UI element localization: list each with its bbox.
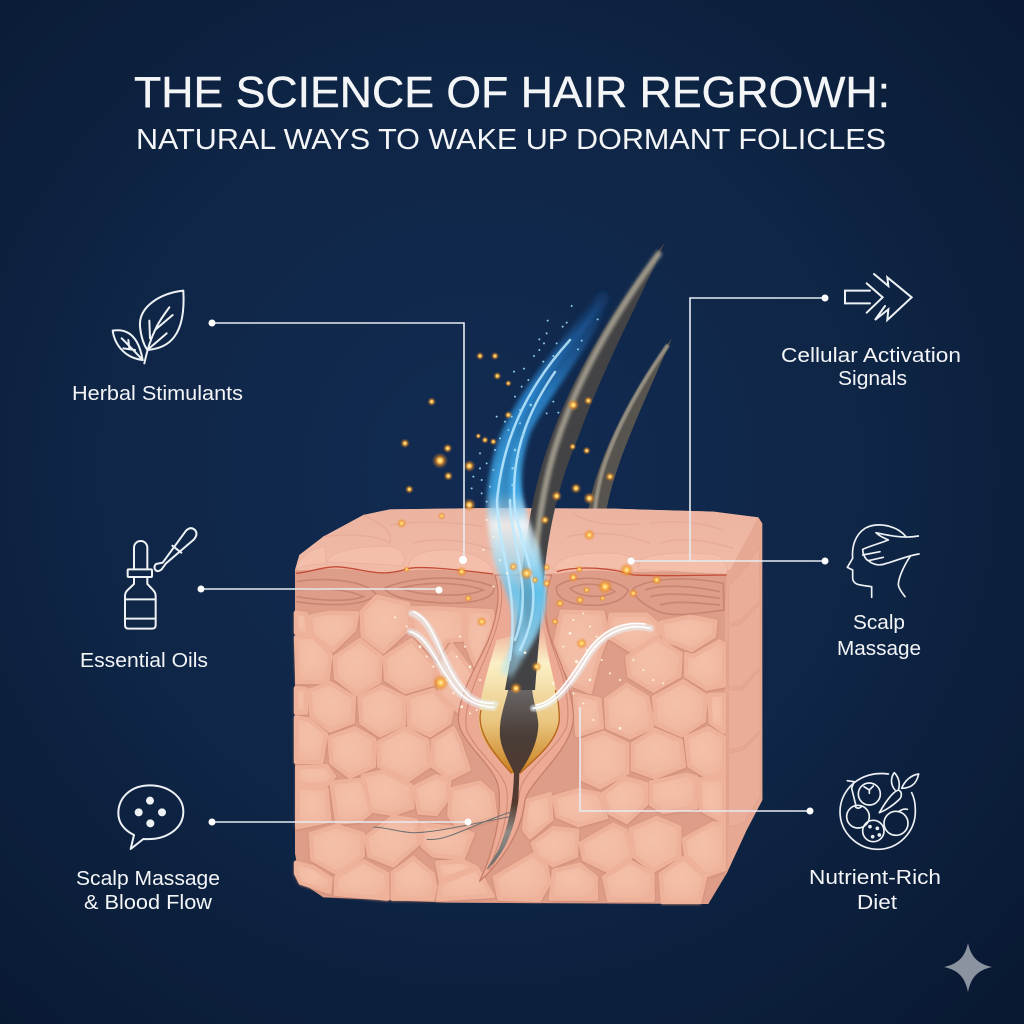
- skin cells: [296, 597, 724, 902]
- cube silhouette: [295, 508, 762, 904]
- blue and white particles: [471, 305, 599, 503]
- label: cellular activation signals: [781, 345, 961, 390]
- icon: cellular activation arrows: [845, 274, 912, 320]
- red junction line: [296, 567, 727, 576]
- dermal band: [295, 569, 727, 618]
- right side face: [725, 517, 762, 873]
- label: cellular activation signals: Signals: [838, 368, 907, 390]
- label: herbal stimulants: Herbal Stimulants: [72, 383, 243, 405]
- blue energy wisps: [493, 297, 603, 685]
- label: scalp massage and blood flow: & Blood Flow: [84, 892, 213, 914]
- label: nutrient-rich diet: Nutrient-Rich: [809, 867, 941, 889]
- side-face cells: [728, 547, 760, 827]
- icon: nutrient-rich fruit and vegetable plate: [840, 773, 919, 849]
- label: scalp massage and blood flow: Scalp Massage: [76, 868, 220, 890]
- label: scalp massage: Massage: [837, 638, 921, 660]
- label: nutrient-rich diet: [809, 867, 941, 914]
- label: scalp massage: [837, 612, 921, 660]
- follicle: [458, 575, 574, 882]
- nerve fibres: [373, 812, 512, 840]
- title: [134, 68, 890, 156]
- skin cube cross-section: [295, 508, 762, 904]
- icon: essential oil bottle and dropper: [125, 528, 196, 629]
- label: cellular activation signals: Cellular Activation: [781, 345, 961, 367]
- golden inner root sheath: [479, 627, 559, 773]
- icon: head with hand massage: [847, 525, 919, 597]
- icon: herbal leaves: [113, 291, 184, 363]
- golden sparkles: [397, 352, 662, 608]
- icon: blood flow speech bubble: [118, 785, 183, 849]
- main hair shaft: [505, 242, 665, 690]
- label: scalp massage and blood flow: [76, 868, 220, 914]
- label: scalp massage: Scalp: [853, 612, 905, 634]
- title: NATURAL WAYS TO WAKE UP DORMANT FOLICLES: [136, 124, 886, 156]
- white sparkle dust in the follicle: [394, 519, 664, 730]
- second hair strand behind the skin: [588, 338, 672, 512]
- white energy waves: [410, 612, 651, 708]
- label: essential oils: Essential Oils: [80, 650, 208, 672]
- hair bulb and root: [486, 680, 538, 870]
- front lip plates: [296, 546, 727, 574]
- follicle outer sheath: [458, 575, 574, 882]
- callout lines with dots: [198, 294, 828, 826]
- golden glow in the dermis: [403, 563, 613, 694]
- title: THE SCIENCE OF HAIR REGROWH:: [134, 68, 890, 117]
- icon: four-point star watermark: [944, 943, 992, 992]
- label: nutrient-rich diet: Diet: [857, 892, 897, 914]
- top surface: [295, 508, 758, 575]
